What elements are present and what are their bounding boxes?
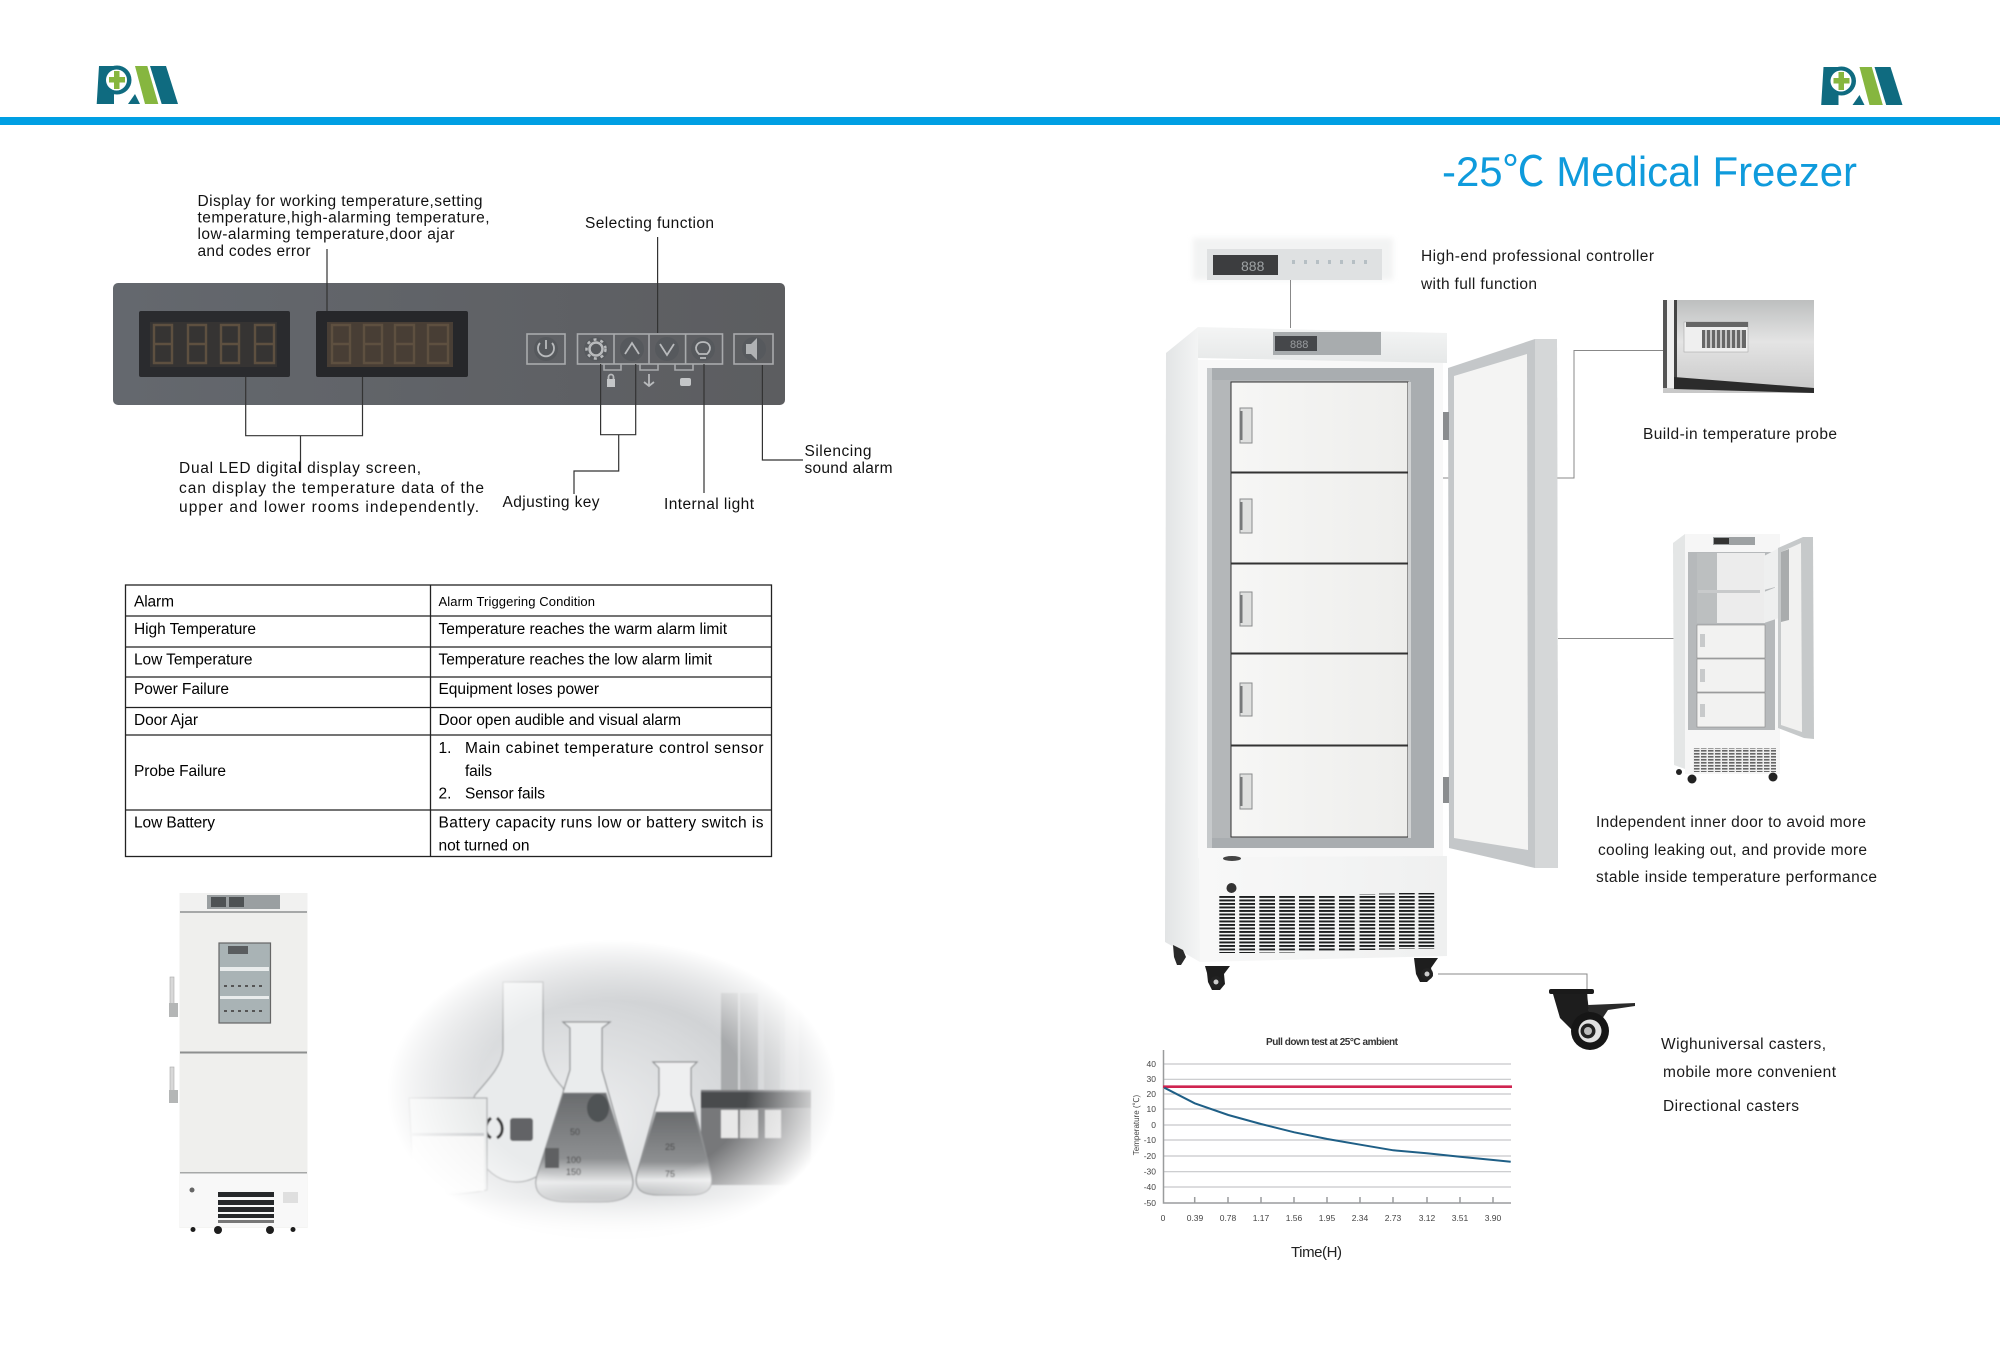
chart: pull down test [1132,1037,1512,1261]
x axis labels: 3.51 [1452,1213,1469,1223]
axes [1164,1050,1511,1203]
base unit [1200,856,1447,962]
display: left LED [139,311,290,377]
y axis labels: 20 [1147,1089,1156,1099]
casters [1173,945,1438,990]
image: controller close-up [1193,238,1393,280]
display: right LED [316,311,468,377]
row: probe failure: Main cabinet temperature control sensor [465,740,764,757]
x axis labels: 3.90 [1485,1213,1502,1223]
table header: Alarm Triggering Condition [438,594,595,609]
upper compartment [1697,548,1779,623]
ambient line [1163,1085,1512,1088]
title: -25℃ Medical Freezer [1442,148,1857,195]
y axis labels: 40 [1147,1059,1156,1069]
text: selecting function: Selecting function [585,215,714,232]
row: power failure: Power Failure [134,681,229,698]
row: probe failure: 2. [438,786,451,802]
y axis labels: -20 [1144,1151,1156,1161]
button group: settings, up, down, light [578,334,722,364]
row: low battery: Low Battery [134,814,215,832]
cooling curve [1164,1088,1511,1162]
table header: Alarm [134,594,174,610]
y axis labels: -50 [1144,1198,1156,1208]
image: controller close-up: 888 [1241,258,1265,274]
row: probe failure: Sensor fails [465,786,545,802]
text: controller caption [1420,248,1654,293]
handles [169,977,178,1103]
cabinet side [1165,327,1200,962]
table: alarm conditions [126,585,772,856]
x axis labels: 1.56 [1286,1213,1303,1223]
hinges [1443,412,1449,803]
text: display description: Display for working temperature,setting [198,193,482,210]
x axis labels [1161,1213,1502,1223]
row: power failure [134,681,599,698]
small conical flask: 75 [665,1169,675,1179]
door [1448,339,1558,868]
beaker [420,1096,489,1191]
large conical flask: 100 [566,1155,581,1165]
row: door ajar [134,712,681,729]
row: low battery [134,814,764,854]
row: probe failure: fails [465,763,492,780]
small conical flask: 25 [665,1142,675,1152]
text: display description: low-alarming temperature,door ajar [198,226,454,243]
ventilation grille [1219,893,1434,953]
y axis labels: 30 [1147,1074,1156,1084]
image: freezer with inner door [1673,534,1814,784]
row: probe failure [134,740,764,802]
test tubes and rack [701,993,811,1185]
row: probe failure: 1. [438,740,451,757]
glass window [219,943,270,1023]
text: dual LED description: can display the temperature data of the [179,480,484,497]
row: power failure: Equipment loses power [438,681,599,698]
text: inner door caption: cooling leaking out, and provide more [1598,842,1867,859]
top cap [1198,327,1447,363]
row: low temperature: Low Temperature [134,652,252,668]
text: inner door caption [1596,814,1877,886]
x axis labels: 1.17 [1253,1213,1270,1223]
text: display description [198,193,490,260]
drawer 3 [1231,564,1408,653]
y axis labels: -10 [1144,1135,1156,1145]
large conical flask: 50 [570,1127,580,1137]
row: probe failure: Probe Failure [134,763,226,780]
row: low temperature [134,652,713,668]
image: temperature probe close-up [1663,300,1814,393]
leader lines: controller [246,237,803,494]
vent [1693,748,1776,772]
interior gasket [1207,368,1434,848]
row: low battery: Battery capacity runs low or battery switch is [438,814,764,832]
y axis labels [1144,1059,1156,1208]
text: inner door caption: stable inside temperature performance [1596,869,1877,886]
text: inner door caption: Independent inner door to avoid more [1596,814,1866,831]
text: dual LED description: Dual LED digital display screen, [179,460,421,477]
control panel diagram [113,283,785,405]
text: display description: and codes error [198,243,310,260]
drawer 5 [1231,746,1408,837]
text: caster caption: Wighuniversal casters, [1661,1036,1826,1053]
text: display description: temperature,high-alarming temperature, [198,210,490,226]
drawer 1 [1231,382,1408,472]
x axis labels: 2.34 [1352,1213,1369,1223]
small conical flask [636,1062,712,1195]
image: caster wheel [1549,989,1635,1050]
lower drawers [1697,625,1765,727]
text: internal light: Internal light [664,496,755,513]
button: power [527,334,565,364]
x axis labels: 0.39 [1187,1213,1204,1223]
round flask [469,982,566,1182]
wheels [190,1226,296,1234]
text: caster caption: mobile more convenient [1663,1064,1837,1081]
y axis labels: 10 [1147,1104,1156,1114]
x axis title: Time(H) [1291,1244,1342,1261]
text: caster caption [1661,1036,1837,1115]
large conical flask: 150 [566,1167,581,1177]
drawer 2 [1231,473,1408,563]
row: low battery: not turned on [438,838,530,854]
cap controller: 888 [1290,339,1308,351]
y axis labels: -40 [1144,1182,1156,1192]
text: controller caption: with full function [1420,276,1537,293]
y axis title: Temperature (℃) [1132,1094,1141,1155]
logo: left [97,66,178,104]
y axis labels: 0 [1151,1120,1156,1130]
leader lines: main freezer [1290,280,1683,1004]
probe housing [1684,322,1748,352]
large conical flask [536,1022,633,1202]
button: mute [734,334,773,364]
image: laboratory glassware [404,949,824,1218]
text: probe caption: Build-in temperature probe [1643,426,1837,443]
image: open main freezer [1165,327,1558,990]
row: door ajar: Door Ajar [134,712,198,729]
row: high temperature: High Temperature [134,621,256,638]
x axis labels: 2.73 [1385,1213,1402,1223]
door [1778,537,1814,739]
x axis labels: 3.12 [1419,1213,1436,1223]
x axis labels: 0.78 [1220,1213,1237,1223]
image: dual-door freezer [169,893,308,1234]
y axis labels: -30 [1144,1166,1156,1176]
row: door ajar: Door open audible and visual alarm [438,712,681,729]
x axis labels: 1.95 [1319,1213,1336,1223]
row: low temperature: Temperature reaches the low alarm limit [438,652,713,668]
header bar [0,117,2000,125]
text: silencing sound alarm: sound alarm [804,460,892,477]
cap controller [1273,332,1381,355]
panel: controller face [113,283,785,405]
bench fade [600,1218,647,1226]
text: controller caption: High-end professional controller [1421,248,1654,265]
text: silencing sound alarm [804,443,892,477]
chart title: Pull down test at 25°C ambient [1266,1037,1399,1048]
table header [134,594,595,610]
text: caster caption: Directional casters [1663,1098,1799,1115]
drawer 4 [1231,654,1408,745]
x axis labels: 0 [1161,1213,1166,1223]
text: dual LED description [179,460,484,516]
wheels [1676,769,1778,784]
text: adjusting key: Adjusting key [502,494,600,511]
row: high temperature [134,621,728,638]
vent [190,1188,298,1223]
text: dual LED description: upper and lower rooms independently. [179,499,479,516]
logo: right [1821,66,1902,105]
gridlines [1163,1064,1511,1187]
row: high temperature: Temperature reaches the warm alarm limit [438,621,728,638]
icons: lock, download, print [604,364,693,387]
cabinet front frame [1198,360,1443,858]
text: silencing sound alarm: Silencing [804,443,872,460]
